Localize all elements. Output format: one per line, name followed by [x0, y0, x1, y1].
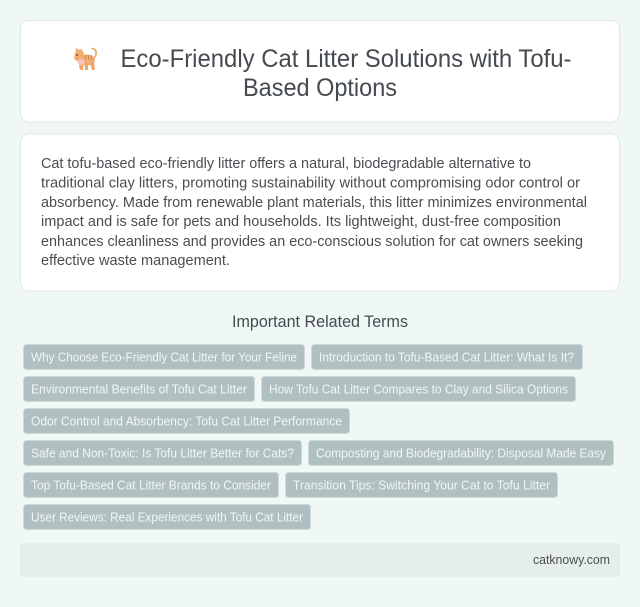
tag: user reviews [24, 504, 310, 530]
tag: why choose [24, 344, 304, 370]
panel: description [20, 134, 620, 291]
tag: comparison [262, 376, 576, 402]
text block: description paragraph: absorbency. Made from renewable plant materials, this litter minimizes environmental [41, 194, 587, 211]
tag: safety [24, 440, 302, 466]
tag: comparison: How Tofu Cat Litter Compares to Clay and Silica Options [269, 382, 568, 396]
tag: safety: Safe and Non-Toxic: Is Tofu Litter Better for Cats? [31, 446, 294, 460]
title: Based Options [243, 74, 397, 102]
tag: why choose: Why Choose Eco-Friendly Cat Litter for Your Feline [31, 350, 297, 364]
tag: composting: Composting and Biodegradability: Disposal Made Easy [316, 446, 606, 460]
text block: description paragraph: traditional clay litters, promoting sustainability without compromising odor control or [41, 174, 580, 192]
tag: transition tips: Transition Tips: Switching Your Cat to Tofu Litter [293, 478, 551, 492]
text block: description paragraph [41, 155, 587, 269]
tag: introduction [312, 344, 582, 370]
tag: top brands: Top Tofu-Based Cat Litter Brands to Consider [31, 478, 272, 492]
tag list: related terms [24, 344, 614, 530]
icon: cat [74, 48, 97, 70]
panel: title card [20, 20, 620, 122]
tag: top brands [24, 472, 278, 498]
tag: environmental benefits [24, 376, 254, 402]
text block: description paragraph: impact and is safe for pets and households. Its lightweight, dust-free composition [41, 213, 561, 230]
tag: odor control [24, 408, 350, 434]
heading: related terms: Important Related Terms [232, 313, 408, 331]
tag: user reviews: User Reviews: Real Experiences with Tofu Cat Litter [31, 510, 304, 524]
text block: description paragraph: enhances cleanliness and provides an eco-conscious solution for cat owners seeking [41, 233, 583, 250]
text block: description paragraph: effective waste management. [41, 252, 230, 269]
tag: odor control: Odor Control and Absorbency: Tofu Cat Litter Performance [31, 414, 342, 428]
text block: description paragraph: Cat tofu-based eco-friendly litter offers a natural, biodegradable alternative to [41, 155, 531, 172]
tag: environmental benefits: Environmental Benefits of Tofu Cat Litter [31, 382, 248, 396]
footer [20, 543, 620, 577]
tag: introduction: Introduction to Tofu-Based Cat Litter: What Is It? [319, 350, 574, 364]
tag: composting [308, 440, 614, 466]
title [120, 45, 572, 102]
tag: transition tips [286, 472, 558, 498]
footer: catknowy.com [533, 552, 610, 567]
title: Eco-Friendly Cat Litter Solutions with Tofu- [120, 45, 572, 73]
